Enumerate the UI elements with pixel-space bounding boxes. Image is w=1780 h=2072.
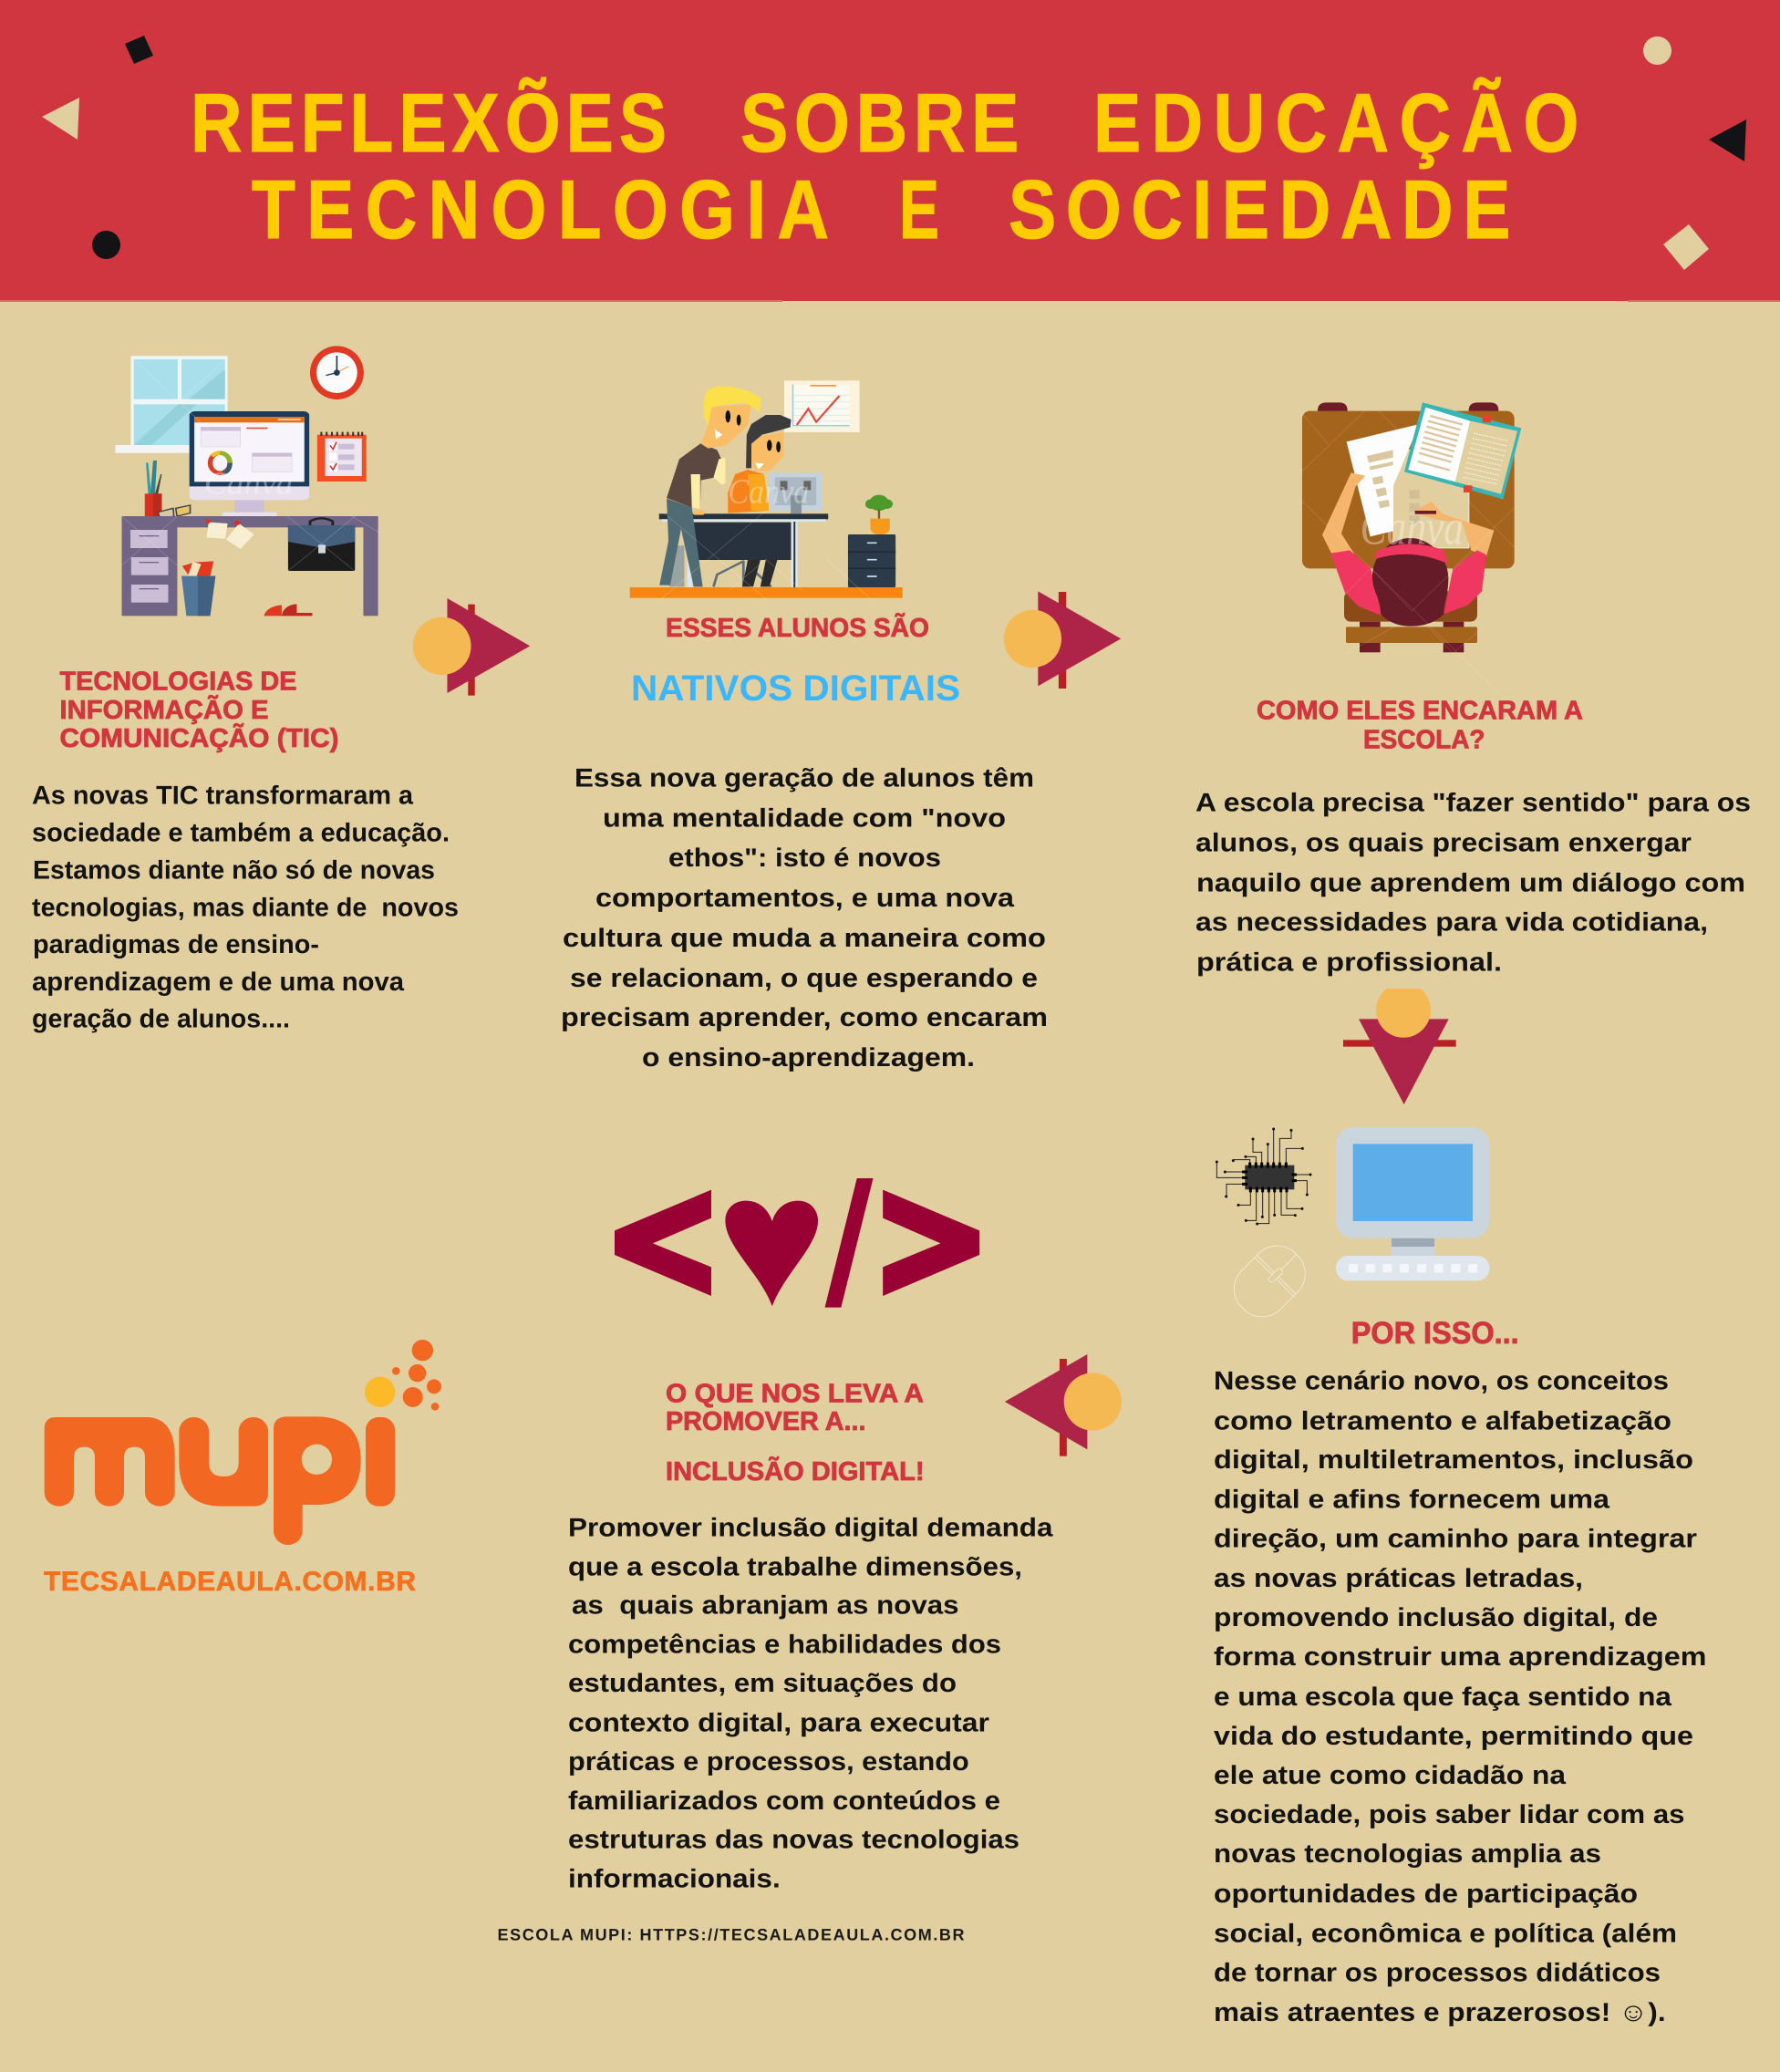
text block: inclusão digital: estudantes, em situações do [568,1669,957,1698]
computer tower [669,545,684,586]
notepad [317,432,367,482]
pencil cup and glasses [145,461,191,519]
text block: por isso: social, econômica e política (além [1214,1919,1677,1948]
text block: a escola: alunos, os quais precisam enxergar [1195,828,1692,857]
text block: por isso: oportunidades de participação [1214,1880,1638,1909]
text block: nativos digitais: uma mentalidade com "novo [603,804,1006,834]
chair seat [1344,591,1477,652]
open book [1404,402,1521,499]
heading: como eles encaram a escola: ESCOLA? [1363,726,1485,755]
chair back [1318,402,1498,413]
text block: por isso: digital e afins fornecem uma [1214,1485,1610,1514]
text block: nativos digitais: Essa nova geração de alunos têm [574,764,1034,793]
illustration: person studying at a desk, top view [1302,402,1521,709]
title [191,78,1578,256]
desktop monitor [190,411,309,516]
text block: por isso: novas tecnologias amplia as [1214,1839,1601,1869]
text block: nativos digitais: precisam aprender, como encaram [561,1003,1048,1032]
text block: por isso: Nesse cenário novo, os conceitos [1214,1367,1669,1396]
text block: por isso: vida do estudante, permitindo que [1214,1722,1693,1751]
plant and cabinet [848,495,895,587]
desktop computer [1336,1127,1489,1280]
shirt [1330,550,1486,616]
heading: TIC [60,668,339,753]
small monitor [769,472,823,513]
slippers [264,604,312,616]
heading: TIC: INFORMAÇÃO E [60,695,268,725]
text block: a escola: as necessidades para vida cotidiana, [1195,908,1708,938]
title: TECNOLOGIA [252,164,829,256]
text block: por isso: de tornar os processos didáticos [1214,1959,1661,1988]
text block: TIC: tecnologias, mas diante de novos [32,893,459,922]
header banner [0,0,1780,302]
illustration: office desk with computer [115,346,378,616]
arms and hands [1322,472,1494,556]
text block: TIC: As novas TIC transformaram a [32,782,414,811]
icon: black circle [92,231,120,259]
title: SOBRE [740,78,1019,170]
text block: por isso: e uma escola que faça sentido na [1214,1683,1672,1712]
text block: por isso: ele atue como cidadão na [1214,1761,1567,1790]
text block: inclusão digital: que a escola trabalhe dimensões, [568,1553,1022,1582]
waste bin [181,561,215,616]
table [1302,411,1515,568]
footer credit: ESCOLA MUPI: HTTPS://TECSALADEAULA.COM.BR [498,1926,965,1944]
text block: TIC: aprendizagem e de uma nova [32,968,405,997]
text block: TIC: geração de alunos.... [32,1005,290,1034]
text block: a escola: A escola precisa "fazer sentido" para os [1195,788,1751,817]
text block: TIC: paradigmas de ensino- [33,930,319,959]
text block: por isso: digital, multiletramentos, inclusão [1214,1445,1693,1475]
text block: TIC: sociedade e também a educação. [32,819,450,848]
heading: o que nos leva a: PROMOVER A... [666,1407,866,1436]
title: SOCIEDADE [1009,164,1510,256]
heading: por isso: POR ISSO... [1351,1316,1519,1351]
wall chart [784,380,860,432]
text block: inclusão digital: Promover inclusão digital demanda [568,1513,1054,1542]
standing student [659,386,761,586]
illustration: two students at a computer [630,380,903,599]
text block: a escola: prática e profissional. [1196,948,1502,978]
text block: por isso: sociedade, pois saber lidar com as [1214,1800,1685,1829]
logo url: TECSALADEAULA.COM.BR [44,1567,416,1597]
computer mouse outline [1224,1235,1316,1328]
title: REFLEXÕES [191,78,667,170]
sticky notes [205,519,254,549]
heading: esses alunos são: ESSES ALUNOS SÃO [666,613,929,643]
text block: por isso: mais atraentes e prazerosos! ☺). [1214,1998,1666,2027]
icon: code heart symbol [615,1178,979,1308]
text block: inclusão digital: as quais abranjam as novas [572,1590,959,1620]
icon: beige triangle [42,98,79,140]
floor [630,587,903,598]
text block: inclusão digital: competências e habilidades dos [568,1631,1001,1660]
text block: nativos digitais: o ensino-aprendizagem. [642,1043,975,1072]
icon: beige circle [1643,36,1671,65]
text block: por isso: forma construir uma aprendizagem [1214,1642,1707,1672]
text block: nativos digitais: cultura que muda a maneira como [563,924,1046,953]
title: EDUCAÇÃO [1093,78,1578,170]
text block: por isso: promovendo inclusão digital, de [1214,1603,1658,1632]
seated student [713,415,791,586]
text block: por isso: direção, um caminho para integrar [1214,1525,1697,1554]
heading: como eles encaram a escola [1257,696,1583,755]
text block: a escola [1195,788,1751,978]
watermark: Canva [728,472,809,511]
text block: por isso: como letramento e alfabetização [1214,1406,1671,1435]
arrow: down [1343,989,1456,1104]
icon: beige diamond [1663,224,1709,270]
watermark: Canva [204,465,293,501]
head with hair band [1372,538,1448,627]
text block: inclusão digital: estruturas das novas tecnologias [568,1826,1019,1855]
heading: como eles encaram a escola: COMO ELES ENCARAM A [1257,696,1583,725]
text block: nativos digitais: comportamentos, e uma nova [595,884,1015,913]
briefcase [288,518,355,571]
papers [1347,424,1469,548]
text block: TIC [32,782,459,1034]
text block: nativos digitais: se relacionam, o que esperando e [570,964,1038,993]
logo: mupi [45,1340,441,1545]
heading: TIC: COMUNICAÇÃO (TIC) [60,723,339,753]
watermark: Canva [1361,500,1464,555]
heading: o que nos leva a [666,1380,925,1487]
text block: nativos digitais: ethos": isto é novos [668,844,941,873]
text block: por isso [1214,1367,1707,2027]
text block: nativos digitais [561,764,1048,1072]
text block: por isso: as novas práticas letradas, [1214,1564,1583,1593]
text block: inclusão digital [568,1513,1054,1893]
text block: inclusão digital: informacionais. [568,1864,781,1893]
icon: black square [125,36,153,64]
desk [121,516,378,616]
text block: inclusão digital: práticas e processos, estando [568,1747,969,1777]
text block: inclusão digital: contexto digital, para executar [568,1708,989,1737]
wall clock [310,346,364,399]
illustration: computer, chip and mouse [1216,1127,1489,1328]
icon: black triangle [1709,119,1746,161]
text block: TIC: Estamos diante não só de novas [33,855,435,885]
heading: o que nos leva a: O QUE NOS LEVA A [666,1380,924,1409]
desk [659,513,828,587]
arrow: right 2 [1004,591,1121,689]
arrow: right 1 [413,598,530,696]
window [115,356,228,453]
heading: nativos digitais: NATIVOS DIGITAIS [631,668,960,709]
arrow: left [1005,1354,1122,1456]
microchip [1216,1127,1311,1225]
text block: inclusão digital: familiarizados com conteúdos e [568,1787,1000,1816]
title: E [899,164,939,256]
text block: a escola: naquilo que aprendem um diálogo com [1196,868,1745,897]
heading: o que nos leva a: INCLUSÃO DIGITAL! [666,1456,925,1487]
heading: TIC: TECNOLOGIAS DE [60,668,297,697]
